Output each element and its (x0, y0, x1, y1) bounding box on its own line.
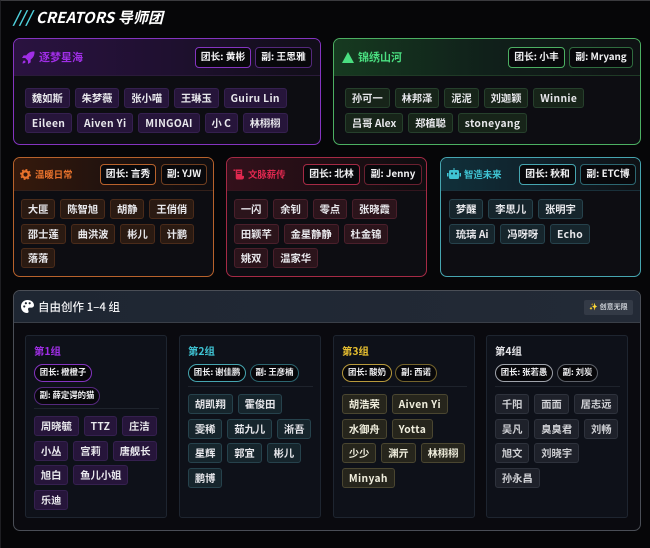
leader chip: 团长: 橙橙子 (40, 366, 86, 378)
member tags: Yotta (399, 421, 426, 436)
member tags: 李思儿 (495, 201, 526, 216)
member tags: 鱼儿小姐 (80, 467, 121, 482)
group name: 第3组 (342, 343, 369, 358)
panel: 文脉薪传 (226, 157, 427, 277)
member tags: 琉璃 Ai (456, 226, 489, 241)
panel: 自由创作 (13, 290, 641, 531)
panel header (441, 158, 640, 191)
member tags (25, 88, 288, 133)
member tags: 雯稀 (195, 421, 215, 436)
panel name: 智造未来 (464, 167, 502, 181)
deputy chip: 副: 王彦楠 (255, 366, 294, 378)
card: 第4组 (486, 335, 628, 518)
deputy chip: 副: ETC博 (586, 166, 630, 180)
badge (584, 300, 633, 315)
member tags (495, 394, 618, 488)
member tags: 彬儿 (127, 226, 148, 241)
member tags: 鹏博 (195, 470, 215, 485)
member tags: 少少 (349, 445, 369, 460)
member tags: 曲洪波 (78, 226, 108, 241)
member tags: Eileen (32, 115, 65, 130)
leader chip (495, 364, 553, 382)
panel: 逐梦星海 (13, 38, 321, 145)
leader chip (519, 164, 576, 184)
card: 第2组 (179, 335, 321, 518)
deputy chip (557, 364, 598, 382)
leader chip: 团长: 张若愚 (501, 366, 547, 378)
deputy chip (580, 164, 636, 184)
deputy chip: 副: Mryang (575, 49, 627, 63)
group name: 第2组 (188, 343, 215, 358)
member tags: 居志远 (581, 396, 612, 411)
member tags: 茹九儿 (234, 421, 265, 436)
member tags: 吴凡 (502, 421, 522, 436)
deputy chip (395, 364, 437, 382)
member tags (345, 88, 584, 133)
deputy chip (34, 387, 100, 405)
member tags: 王俏俏 (156, 201, 187, 216)
leader chip: 团长: 北林 (309, 166, 354, 180)
member tags: 彬儿 (274, 445, 294, 460)
member tags: 小丛 (41, 443, 61, 458)
deputy chip: 副: 王思雅 (261, 49, 306, 63)
member tags: 郑植聪 (415, 115, 446, 130)
panel name: 自由创作 1–4 组 (38, 298, 120, 314)
member tags: 庄洁 (129, 418, 150, 433)
leader chip (188, 364, 246, 382)
member tags: 霍俊田 (245, 396, 275, 411)
leader chip (303, 164, 360, 184)
member tags: Echo (557, 226, 583, 241)
leader chip: 团长: 言秀 (106, 166, 150, 180)
member tags: 旭文 (502, 445, 522, 460)
member tags (449, 199, 590, 244)
leader chip (34, 364, 92, 382)
member tags: 一闪 (241, 201, 261, 216)
panel: 温暖日常 (13, 157, 214, 277)
member tags: 魏如斯 (32, 90, 63, 105)
member tags: Aiven Yi (399, 396, 441, 411)
member tags: 姚双 (241, 250, 261, 265)
leader chip (100, 164, 156, 184)
member tags: 邵士莲 (28, 226, 59, 241)
deputy chip (569, 47, 633, 68)
member tags: 冯呀呀 (507, 226, 538, 241)
member tags: 旭白 (41, 467, 61, 482)
member tags (188, 394, 311, 488)
member tags: 臭臭君 (541, 421, 572, 436)
leader chip: 团长: 秋和 (525, 166, 570, 180)
member tags: TTZ (91, 418, 110, 433)
member tags: 胡静 (117, 201, 138, 216)
deputy chip (250, 364, 299, 382)
leader chip: 团长: 黄彬 (201, 49, 245, 63)
badge: ✨ 创意无限 (589, 302, 628, 312)
member tags: 梦醒 (456, 201, 476, 216)
panel: 智造未来 (440, 157, 641, 277)
leader chip (342, 364, 392, 382)
leader chip: 团长: 酸奶 (348, 366, 386, 378)
member tags: 渊亓 (388, 445, 409, 460)
member tags: 刘迦颖 (491, 90, 522, 105)
card: 第1组 (25, 335, 167, 518)
deputy chip (364, 164, 422, 184)
panel header (14, 39, 320, 76)
panel name: 温暖日常 (35, 167, 73, 181)
member tags: Guiru Lin (231, 90, 280, 105)
member tags: 林栩栩 (428, 445, 459, 460)
member tags: 张小喵 (131, 90, 162, 105)
leader chip (508, 47, 565, 68)
title: /// CREATORS 导师团 (13, 4, 163, 28)
deputy chip: 副: YJW (167, 166, 201, 180)
member tags: MINGOAI (145, 115, 193, 130)
member tags: 田颖芊 (241, 226, 272, 241)
member tags: 乐迪 (41, 492, 61, 507)
panel name: 逐梦星海 (39, 49, 83, 65)
member tags: 温家华 (280, 250, 311, 265)
member tags (21, 199, 194, 268)
panel header (334, 39, 640, 76)
member tags: 星辉 (195, 445, 215, 460)
member tags: 郭宜 (234, 445, 255, 460)
leader chip (195, 47, 251, 68)
member tags: Winnie (540, 90, 577, 105)
member tags: 张明宇 (545, 201, 576, 216)
member tags (34, 416, 157, 510)
member tags: stoneyang (465, 115, 520, 130)
member tags: 孙可一 (352, 90, 383, 105)
member tags: 胡凯翔 (195, 396, 226, 411)
group name: 第4组 (495, 343, 522, 358)
deputy chip: 副: 薛定谔的猫 (40, 389, 94, 401)
member tags: Aiven Yi (84, 115, 126, 130)
deputy chip: 副: Jenny (371, 166, 415, 180)
member tags: 刘畅 (591, 421, 612, 436)
member tags: 面面 (541, 396, 562, 411)
member tags: 王琳玉 (181, 90, 212, 105)
deputy chip: 副: 刘炭 (563, 366, 592, 378)
member tags: 金星静静 (291, 226, 332, 241)
panel header (14, 291, 640, 323)
member tags: 吕哥 Alex (352, 115, 396, 130)
member tags: 孙永昌 (502, 470, 533, 485)
member tags: 大匪 (28, 201, 48, 216)
member tags: 周晓毓 (41, 418, 72, 433)
member tags: 千阳 (502, 396, 522, 411)
member tags: 余钊 (280, 201, 301, 216)
member tags: 朱梦薇 (82, 90, 112, 105)
card: 第3组 (333, 335, 475, 518)
member tags: 胡浩荣 (349, 396, 380, 411)
leader chip: 团长: 谢佳鹏 (194, 366, 240, 378)
panel header (227, 158, 426, 191)
member tags: 小 C (212, 115, 231, 130)
member tags: 落落 (28, 250, 48, 265)
member tags: Minyah (349, 470, 388, 485)
member tags: 计鹏 (167, 226, 187, 241)
group name: 第1组 (34, 343, 61, 358)
panel name: 锦绣山河 (358, 49, 402, 65)
member tags: 杜金锦 (351, 226, 381, 241)
member tags: 陈智旭 (67, 201, 98, 216)
member tags: 宫莉 (80, 443, 101, 458)
member tags (234, 199, 397, 268)
member tags: 张晓霞 (359, 201, 390, 216)
member tags: 刘晓宇 (541, 445, 572, 460)
panel header (14, 158, 213, 191)
member tags: 零点 (320, 201, 340, 216)
deputy chip: 副: 西诺 (401, 366, 431, 378)
member tags: 水御舟 (349, 421, 380, 436)
member tags: 泥泥 (451, 90, 472, 105)
member tags: 林邦泽 (402, 90, 432, 105)
member tags: 林栩栩 (250, 115, 281, 130)
deputy chip (255, 47, 312, 68)
member tags: 唐舰长 (120, 443, 151, 458)
member tags (342, 394, 465, 488)
panel: 锦绣山河 (333, 38, 641, 145)
panel name: 文脉薪传 (248, 167, 286, 181)
deputy chip (161, 164, 207, 184)
leader chip: 团长: 小丰 (514, 49, 559, 63)
panel name (447, 167, 502, 181)
member tags: 淅吾 (284, 421, 305, 436)
